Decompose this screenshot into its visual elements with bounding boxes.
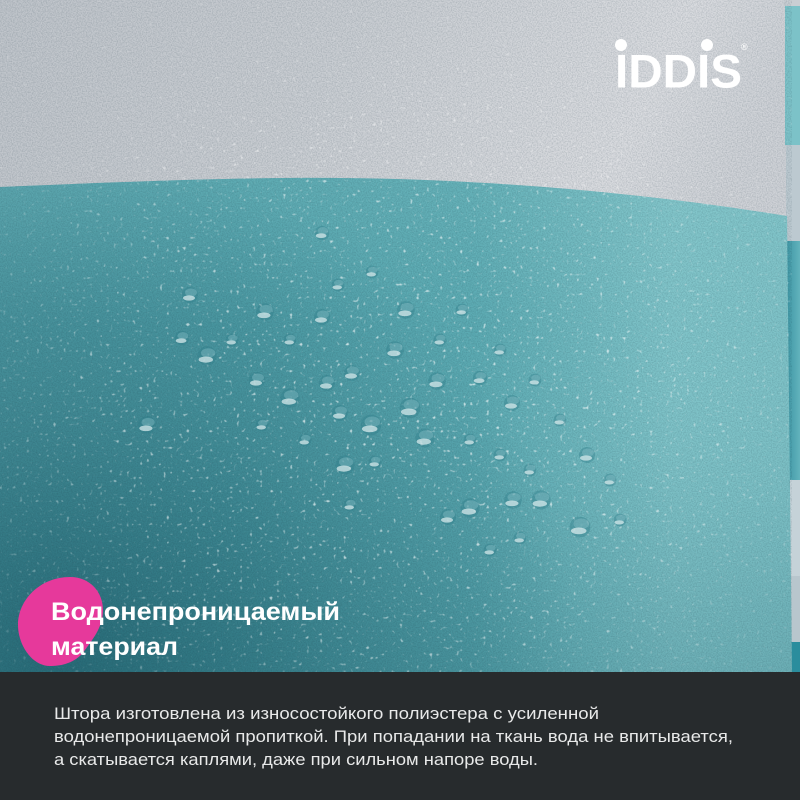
gray fabric band [0, 0, 800, 240]
teal fabric band [0, 178, 792, 672]
body text [54, 705, 733, 769]
body text: Штора изготовлена из износостойкого полиэстера с усиленной [54, 705, 599, 723]
pink blob accent [18, 577, 103, 666]
logo dot left [615, 39, 627, 51]
logo wordmark: IDDIS [615, 44, 742, 98]
heading: материал [51, 633, 178, 661]
teal band shading [0, 178, 792, 672]
logo: IDDIS [615, 39, 748, 98]
teal band lower-left shading [0, 178, 792, 672]
logo registered mark: ® [741, 42, 748, 52]
heading: Водонепроницаемый [51, 598, 340, 626]
right stripes of the folded curtain [784, 0, 800, 672]
logo dot right [701, 39, 713, 51]
body text: водонепроницаемой пропиткой. При попадании на ткань вода не впитывается, [54, 728, 733, 746]
body text: а скатывается каплями, даже при сильном напоре воды. [54, 751, 538, 769]
heading [51, 598, 340, 661]
large water drops [138, 226, 626, 556]
bottom dark panel [0, 672, 800, 800]
